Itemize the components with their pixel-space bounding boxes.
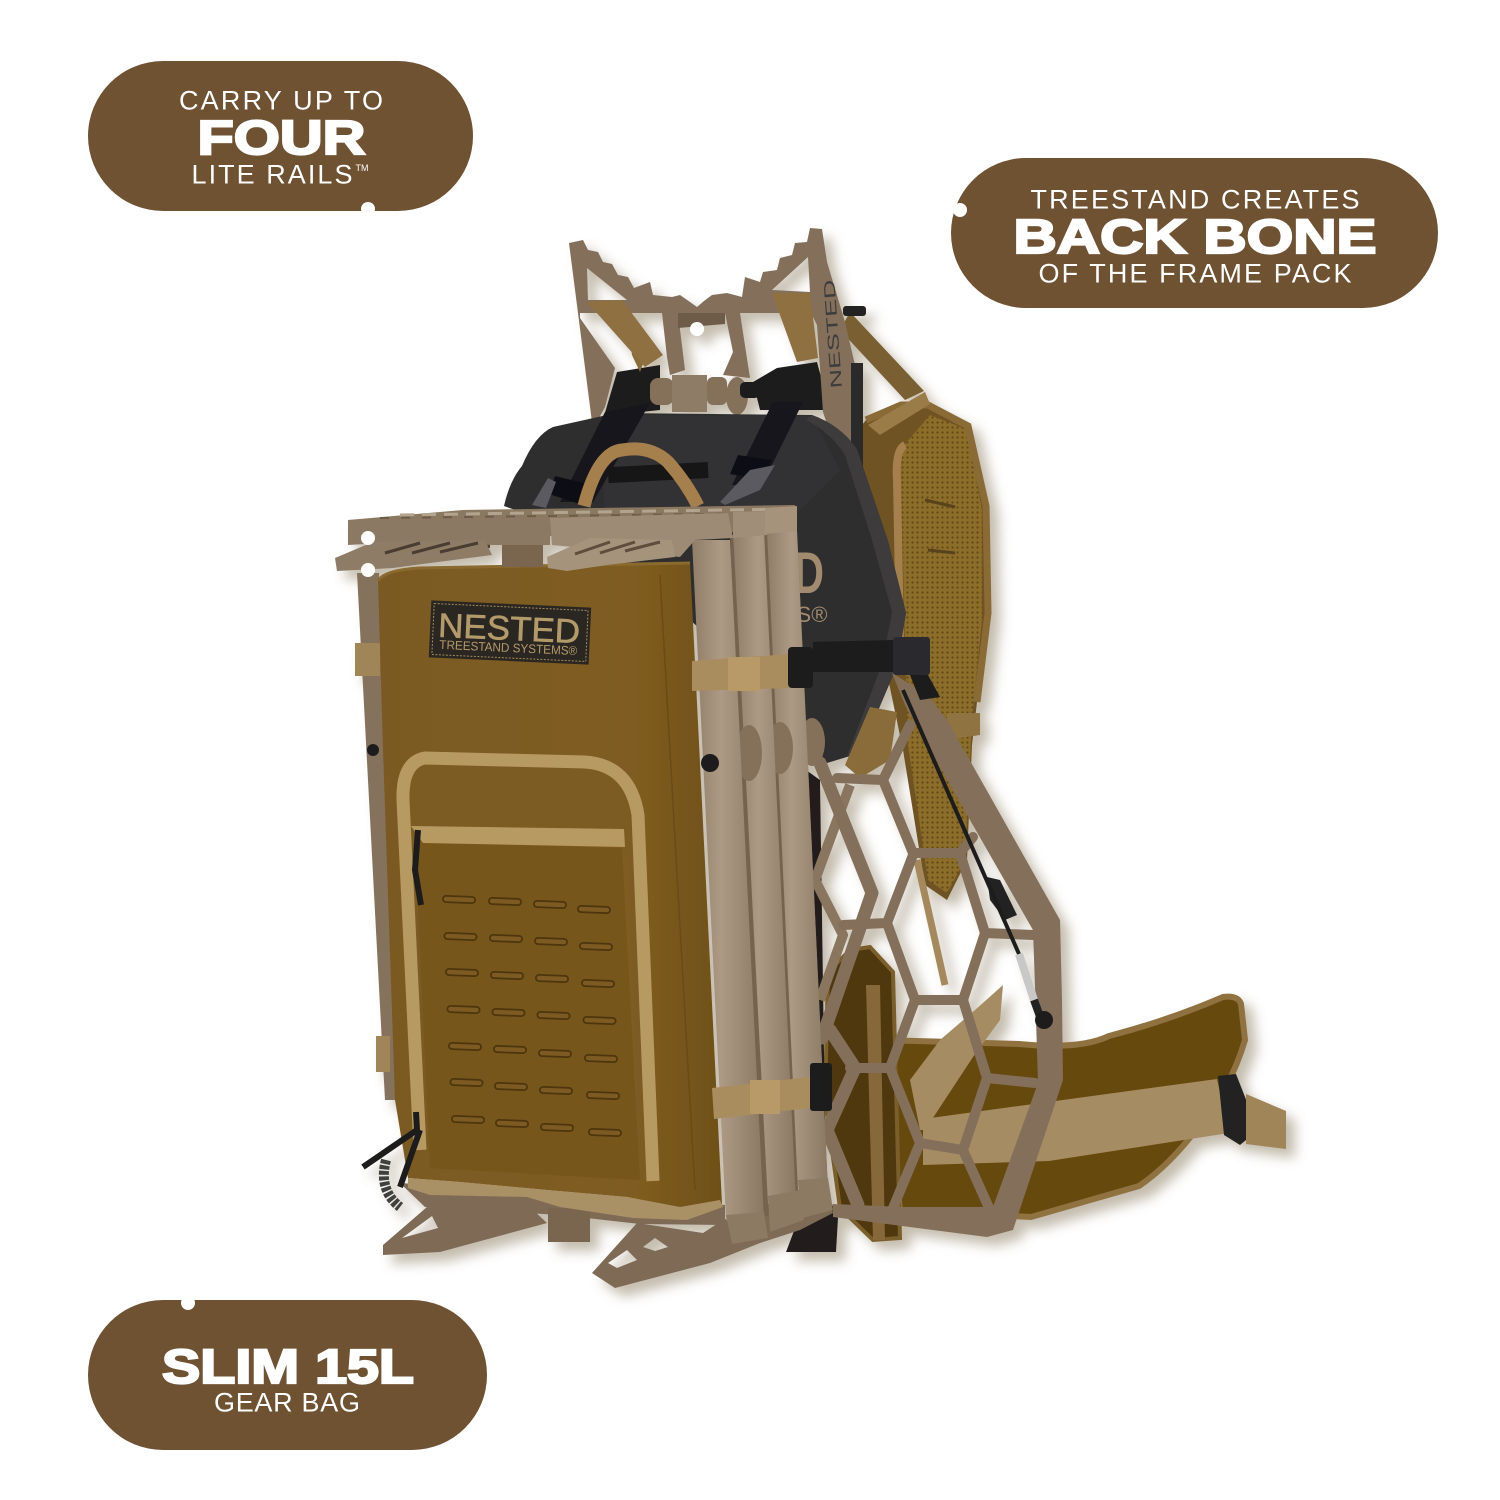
- black frame clip: [987, 877, 1017, 920]
- laser-cut slots: [446, 899, 618, 1133]
- upper rail strap and buckles: [692, 637, 940, 700]
- rear tube: [357, 573, 398, 1100]
- frame brand text: NESTED: [821, 279, 846, 389]
- callout: carry up to four lite rails: LITE RAILS: [192, 160, 352, 190]
- callout: carry up to four lite rails: CARRY UP TO: [179, 86, 383, 116]
- rail top tray: [335, 505, 797, 577]
- lower rail strap and buckle: [712, 1063, 832, 1119]
- upper curved pad behind frame: [845, 707, 897, 778]
- dark gap behind tubes: [786, 770, 838, 1252]
- partial logo behind rails: D: [794, 541, 824, 606]
- product illustration: frame pack with gear bag: [335, 228, 1286, 1288]
- black back pad: [504, 402, 906, 763]
- callout: treestand creates back bone: [951, 158, 1438, 308]
- thin webbing strap: [917, 860, 945, 985]
- nested patch: TREESTAND SYSTEMS®: [439, 638, 578, 658]
- waist belt: [882, 997, 1286, 1217]
- treestand top frame: [569, 228, 863, 470]
- left strap tabs: [355, 643, 390, 1072]
- callout: slim 15L gear bag: SLIM 15L: [162, 1341, 414, 1394]
- nested patch: NESTED: [437, 607, 581, 651]
- callout: treestand creates back bone: OF THE FRAME PACK: [1038, 258, 1352, 288]
- front pocket: [403, 758, 653, 1180]
- zipper pulls: [363, 830, 421, 1187]
- shoulder strap with mesh: [840, 306, 988, 900]
- base and feet: [383, 1183, 833, 1288]
- folded rails with pegs: [367, 531, 833, 1244]
- lumbar pad: [825, 947, 900, 1240]
- bottom trim: [408, 1178, 723, 1220]
- diagonal tan strap: [910, 985, 1003, 1130]
- lower hexagonal frame: [815, 673, 1063, 1237]
- black back pad: S®: [797, 602, 827, 627]
- callout: carry up to four lite rails: [88, 61, 473, 216]
- nested patch: [429, 600, 591, 665]
- rope and lower zipper pulls: [384, 1160, 400, 1207]
- gear bag body: [363, 563, 723, 1220]
- callout: slim 15L gear bag: GEAR BAG: [214, 1388, 360, 1418]
- callout: treestand creates back bone: BACK BONE: [1014, 211, 1376, 264]
- cable and bolt: [903, 690, 1053, 1029]
- callout: treestand creates back bone: TREESTAND CREATES: [1030, 184, 1360, 214]
- carry handle: [584, 449, 698, 506]
- callout: carry up to four lite rails: FOUR: [198, 112, 366, 165]
- callout: carry up to four lite rails: TM: [356, 163, 368, 173]
- callout: slim 15L gear bag: [88, 1296, 487, 1450]
